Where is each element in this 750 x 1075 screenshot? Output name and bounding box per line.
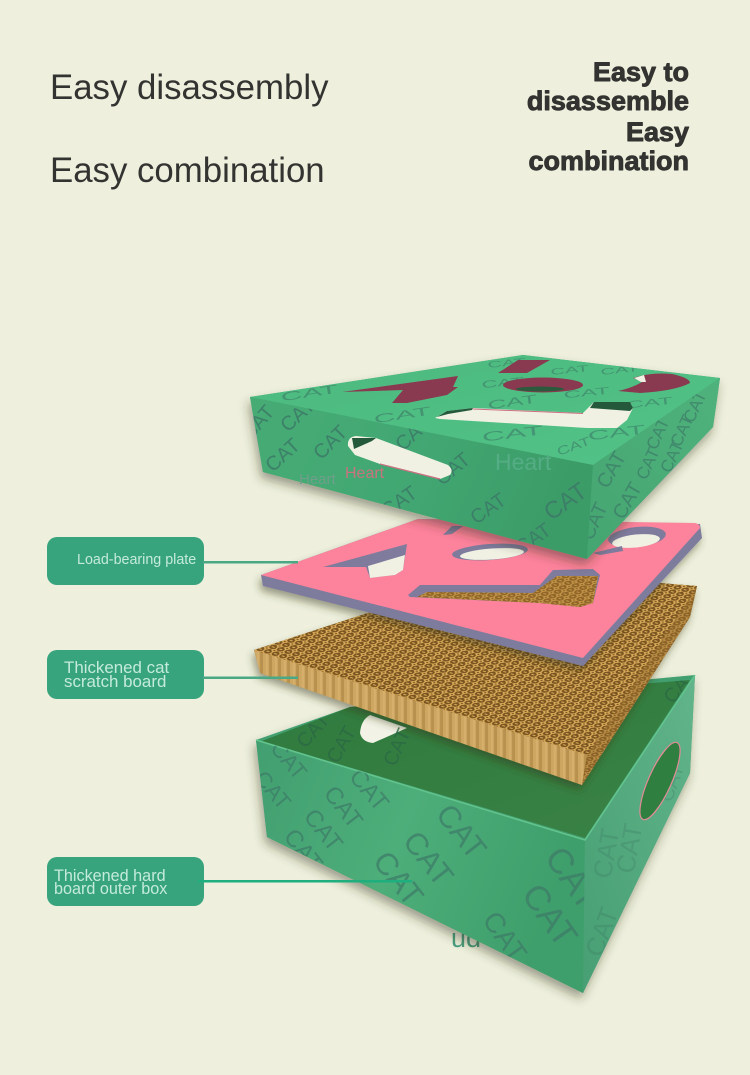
outer box: left face CAT print (260, 746, 584, 957)
scratch board: honeycomb top (254, 570, 697, 755)
outer box: right face CAT print: CAT (655, 761, 689, 805)
outer box: right face CAT print: CAT (587, 826, 625, 881)
outer box: interior CAT print: CAT (660, 664, 701, 708)
outer box: interior (262, 680, 690, 838)
outer box: interior CAT print (298, 680, 688, 764)
label: thickened cat scratch board: Thickened cat (64, 658, 169, 677)
lid: left CAT print: CAT (377, 482, 422, 522)
lid: right CAT print: CAT (609, 479, 647, 523)
scratch board: body and shadow (254, 570, 697, 785)
lid: left CAT print: CAT (276, 394, 320, 437)
lid: left CAT print: CAT (511, 519, 556, 559)
lid: right CAT print: CAT (593, 448, 631, 492)
lid: top face (250, 355, 720, 465)
heading: right (527, 57, 689, 176)
outer box: left face CAT print: CAT (396, 824, 460, 893)
label: load-bearing plate (47, 537, 204, 585)
outer box: right face (583, 675, 695, 993)
outer box: rim highlight (256, 675, 695, 840)
lid: top CAT print: CAT (587, 422, 646, 443)
lid: top CAT print: CAT (487, 356, 527, 370)
lid: top CAT print: CAT (600, 363, 640, 377)
lid: right CAT print: CAT (642, 415, 674, 453)
leader line: scratch board (203, 676, 298, 679)
heading: right: Easy to (593, 57, 689, 87)
lid: right CAT print: CAT (632, 445, 664, 483)
outer box: right face CAT print: CAT (610, 821, 648, 876)
outer box: interior CAT print: CAT (379, 725, 416, 770)
lid: left CAT print: CAT (309, 421, 352, 464)
label: thickened hard board outer box: board outer box (54, 880, 167, 898)
outer box: interior CAT print: CAT (323, 723, 361, 767)
heading: left: Easy disassembly (50, 68, 329, 107)
outer box: side handle (632, 738, 688, 824)
outer box (bottom layer) (250, 664, 701, 993)
plate: triangle hole (323, 544, 407, 578)
lid: top shape hole 3 (503, 378, 583, 392)
outer box: interior hole (360, 715, 407, 743)
outer box: left face CAT print: CAT (514, 877, 585, 954)
scratch board: front edge (254, 650, 587, 785)
outer box: left face (256, 740, 585, 993)
heading: left (50, 68, 329, 190)
lid: top CAT print: CAT (550, 363, 590, 377)
label: thickened hard board outer box: Thickened hard (54, 867, 166, 885)
lid: stray Heart labels (299, 449, 552, 488)
lid: left CAT print: CAT (539, 477, 593, 526)
lid: top CAT print: CAT (373, 404, 432, 426)
outer box: left face CAT print: CAT (344, 764, 394, 817)
lid: left CAT print: CAT (466, 489, 511, 529)
plate: thickness and shadow (261, 519, 702, 666)
lid: left CAT print: CAT (238, 401, 279, 445)
lid: right CAT print: CAT (679, 388, 711, 426)
plate: top face (261, 519, 700, 658)
lid: stray Heart labels: Heart (299, 471, 337, 488)
lid: left CAT print: CAT (261, 434, 305, 477)
lid: top CAT print: CAT (563, 384, 610, 401)
heading: right: disassemble (527, 86, 689, 116)
outer box: left face CAT print: CAT (477, 906, 533, 968)
lid: left CAT print (254, 404, 584, 545)
lid: right CAT print: CAT (576, 499, 613, 544)
leader line: outer box (198, 880, 412, 882)
plate: oval hole (452, 541, 528, 563)
lid: right CAT print: CAT (656, 438, 688, 476)
lid: top CAT print (280, 356, 673, 459)
outer box: left face CAT print: CAT (429, 797, 493, 866)
lid: top shape hole 1 (342, 376, 458, 403)
label: thickened cat scratch board (47, 650, 204, 699)
lid: top CAT print: CAT (626, 394, 673, 411)
lid: left face (250, 397, 593, 559)
label: thickened hard board outer box (47, 857, 204, 906)
outer box: right face CAT print: CAT (579, 903, 624, 961)
outer box: left face CAT print: CAT (318, 781, 368, 834)
lid: left CAT print: CAT (431, 449, 475, 490)
load-bearing plate (261, 519, 702, 666)
lid: right face (587, 378, 720, 559)
outer box: right face CAT print (588, 770, 682, 955)
lid: top CAT print: CAT (481, 375, 525, 391)
outer box: left face CAT print: CAT (366, 844, 430, 913)
lid: top CAT print: CAT (555, 434, 592, 459)
lid: body and shadow (250, 355, 720, 559)
lid: side handle (348, 436, 452, 479)
lid: top CAT print: CAT (280, 382, 339, 404)
infographic canvas (47, 62, 724, 1003)
lid: stray Heart labels: Heart (345, 465, 385, 482)
lid: top shape hole 5 (435, 402, 633, 428)
outer box: left face CAT print: CAT (298, 804, 348, 857)
plate: small hole (443, 526, 463, 535)
scratch board: right edge (582, 586, 697, 785)
outer box: interior CAT print: CAT (292, 709, 335, 753)
outer box: left face CAT print: CAT (537, 840, 608, 917)
plate: long hole (408, 569, 600, 607)
heading: right: Easy (626, 117, 689, 147)
lid: top CAT print: CAT (481, 423, 544, 445)
label: thickened cat scratch board: scratch board (64, 672, 166, 691)
lid: right CAT print (588, 394, 705, 538)
heading: right: combination (528, 146, 689, 176)
top lid (238, 355, 720, 559)
label: load-bearing plate: Load-bearing plate (77, 552, 196, 568)
lid: left CAT print: CAT (391, 413, 435, 456)
lid: right CAT print: CAT (666, 412, 698, 450)
outer box: body and shadow (256, 675, 695, 993)
cat scratch board (254, 570, 697, 785)
lid: top shape hole 2 (498, 360, 550, 373)
plate: crescent hole (593, 524, 667, 555)
outer box: left face CAT print: CAT (266, 736, 312, 784)
leader line: load-bearing plate (203, 561, 298, 564)
outer box: left face CAT print: CAT (278, 824, 328, 877)
outer box: left face CAT print: CAT (250, 766, 296, 814)
stray label under outer box: ud (451, 923, 481, 953)
lid: top shape hole 4 (618, 374, 690, 393)
lid: top CAT print: CAT (487, 393, 538, 412)
lid: stray Heart labels: Heart (495, 449, 552, 475)
heading: left: Easy combination (50, 151, 325, 190)
